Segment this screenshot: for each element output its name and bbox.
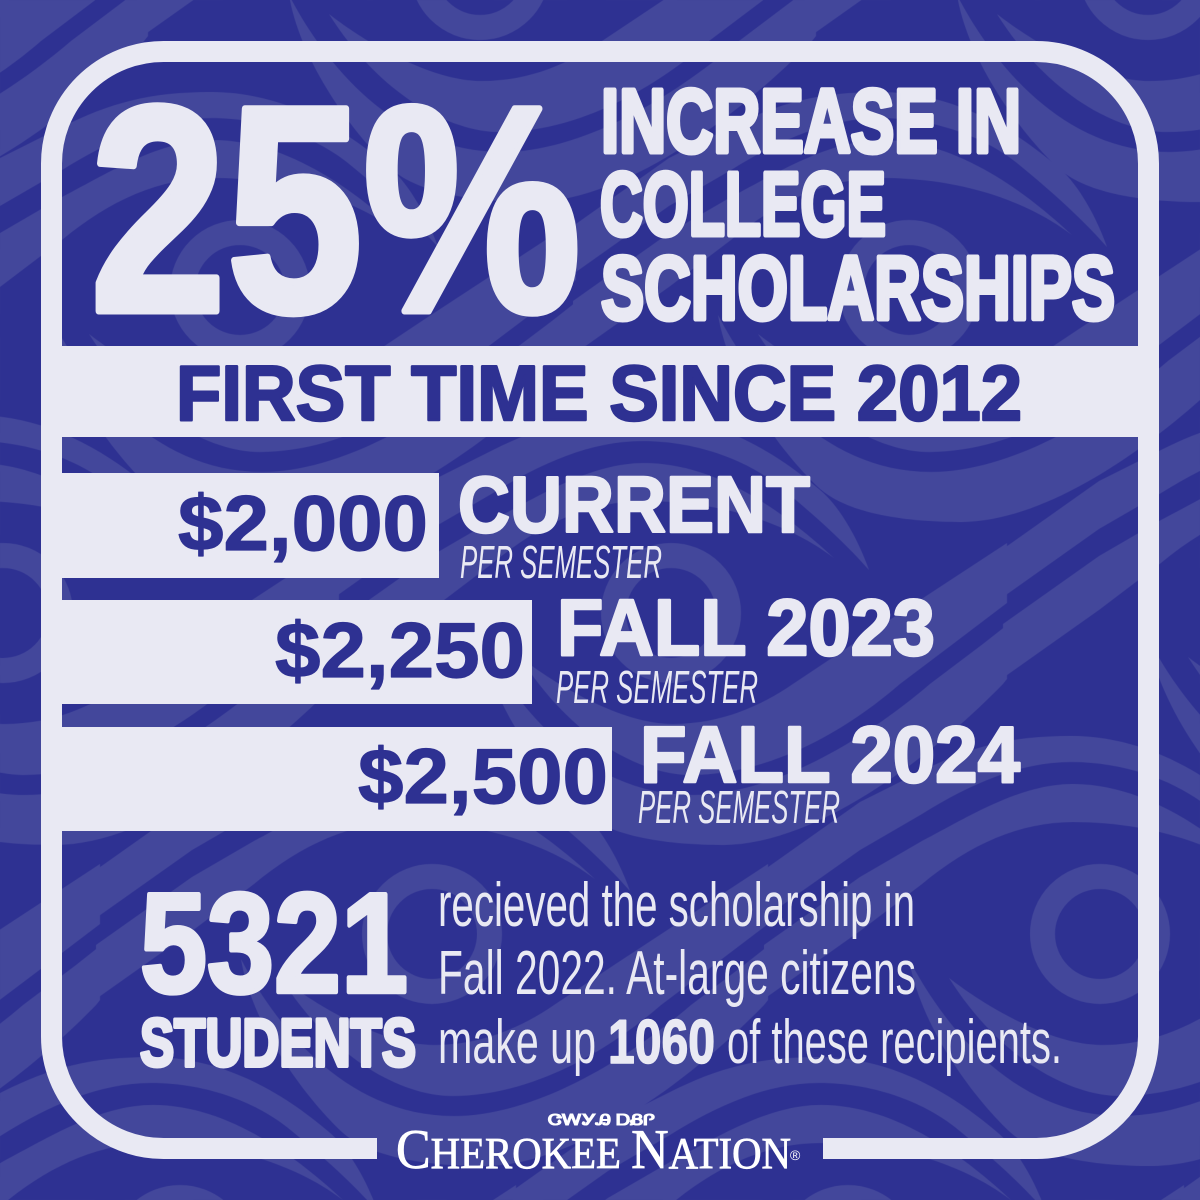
per semester: PER SEMESTER	[638, 781, 840, 833]
registered mark: ®	[790, 1147, 801, 1163]
5321 figure: 5321	[140, 864, 408, 1023]
bar: fall 2024 amount	[62, 710, 1020, 833]
bar: current amount	[62, 460, 810, 588]
line 3 start: make up	[438, 1008, 596, 1077]
wordmark: CHEROKEE NATION	[396, 1119, 791, 1181]
line 2: Fall 2022. At-large citizens	[438, 939, 916, 1008]
student count	[140, 864, 416, 1081]
students label: STUDENTS	[140, 1005, 416, 1081]
label: CURRENT	[458, 460, 810, 549]
line 3 bold number: 1060	[608, 1008, 715, 1077]
bar: fall 2023 amount	[62, 583, 935, 713]
amount: $2,250	[275, 606, 525, 694]
per semester: PER SEMESTER	[460, 536, 662, 588]
banner: first time since 2012	[62, 346, 1139, 437]
logo: Cherokee Nation	[396, 1113, 801, 1181]
amount: $2,500	[358, 732, 608, 820]
label: FALL 2024	[640, 710, 1020, 799]
headline line 2: COLLEGE	[600, 155, 886, 255]
syllabary line: ᏣᎳᎩᎯ ᎠᏰᎵ	[548, 1113, 656, 1129]
label: FALL 2023	[557, 583, 935, 672]
recipients description	[438, 871, 1062, 1077]
25 percent figure: 25%	[90, 46, 581, 374]
line 1: recieved the scholarship in	[438, 871, 915, 940]
amount: $2,000	[178, 479, 428, 567]
per semester: PER SEMESTER	[556, 661, 758, 713]
headline line 1: INCREASE IN	[601, 72, 1021, 172]
banner text: FIRST TIME SINCE 2012	[176, 349, 1022, 437]
headline	[90, 46, 1115, 374]
